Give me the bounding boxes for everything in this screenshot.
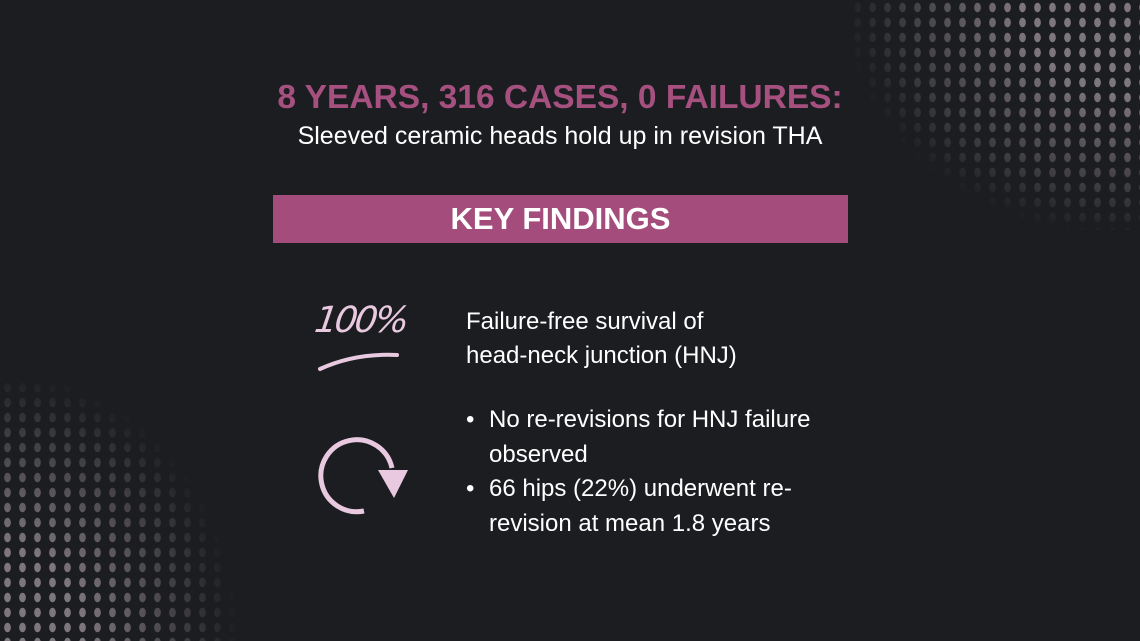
subtitle: Sleeved ceramic heads hold up in revision THA bbox=[298, 122, 822, 150]
bullet list: • bbox=[466, 475, 474, 502]
bullet list: • bbox=[466, 406, 474, 433]
bullet list: revision at mean 1.8 years bbox=[489, 510, 770, 537]
banner: key findings: KEY FINDINGS bbox=[451, 201, 670, 236]
icon: circular arrow bbox=[318, 437, 408, 514]
text: survival bbox=[466, 308, 737, 369]
bullet list: No re-revisions for HNJ failure bbox=[489, 406, 810, 433]
text: survival: head-neck junction (HNJ) bbox=[466, 342, 737, 369]
icon: 100 percent bbox=[312, 300, 409, 372]
text: survival: Failure-free survival of bbox=[466, 308, 703, 335]
title: 8 YEARS, 316 CASES, 0 FAILURES: bbox=[277, 79, 843, 116]
bullet list: 66 hips (22%) underwent re- bbox=[489, 475, 792, 502]
banner: key findings bbox=[273, 195, 848, 243]
bullet list bbox=[466, 406, 810, 537]
bullet list: observed bbox=[489, 441, 588, 468]
icon: 100 percent: 100% bbox=[312, 300, 409, 341]
